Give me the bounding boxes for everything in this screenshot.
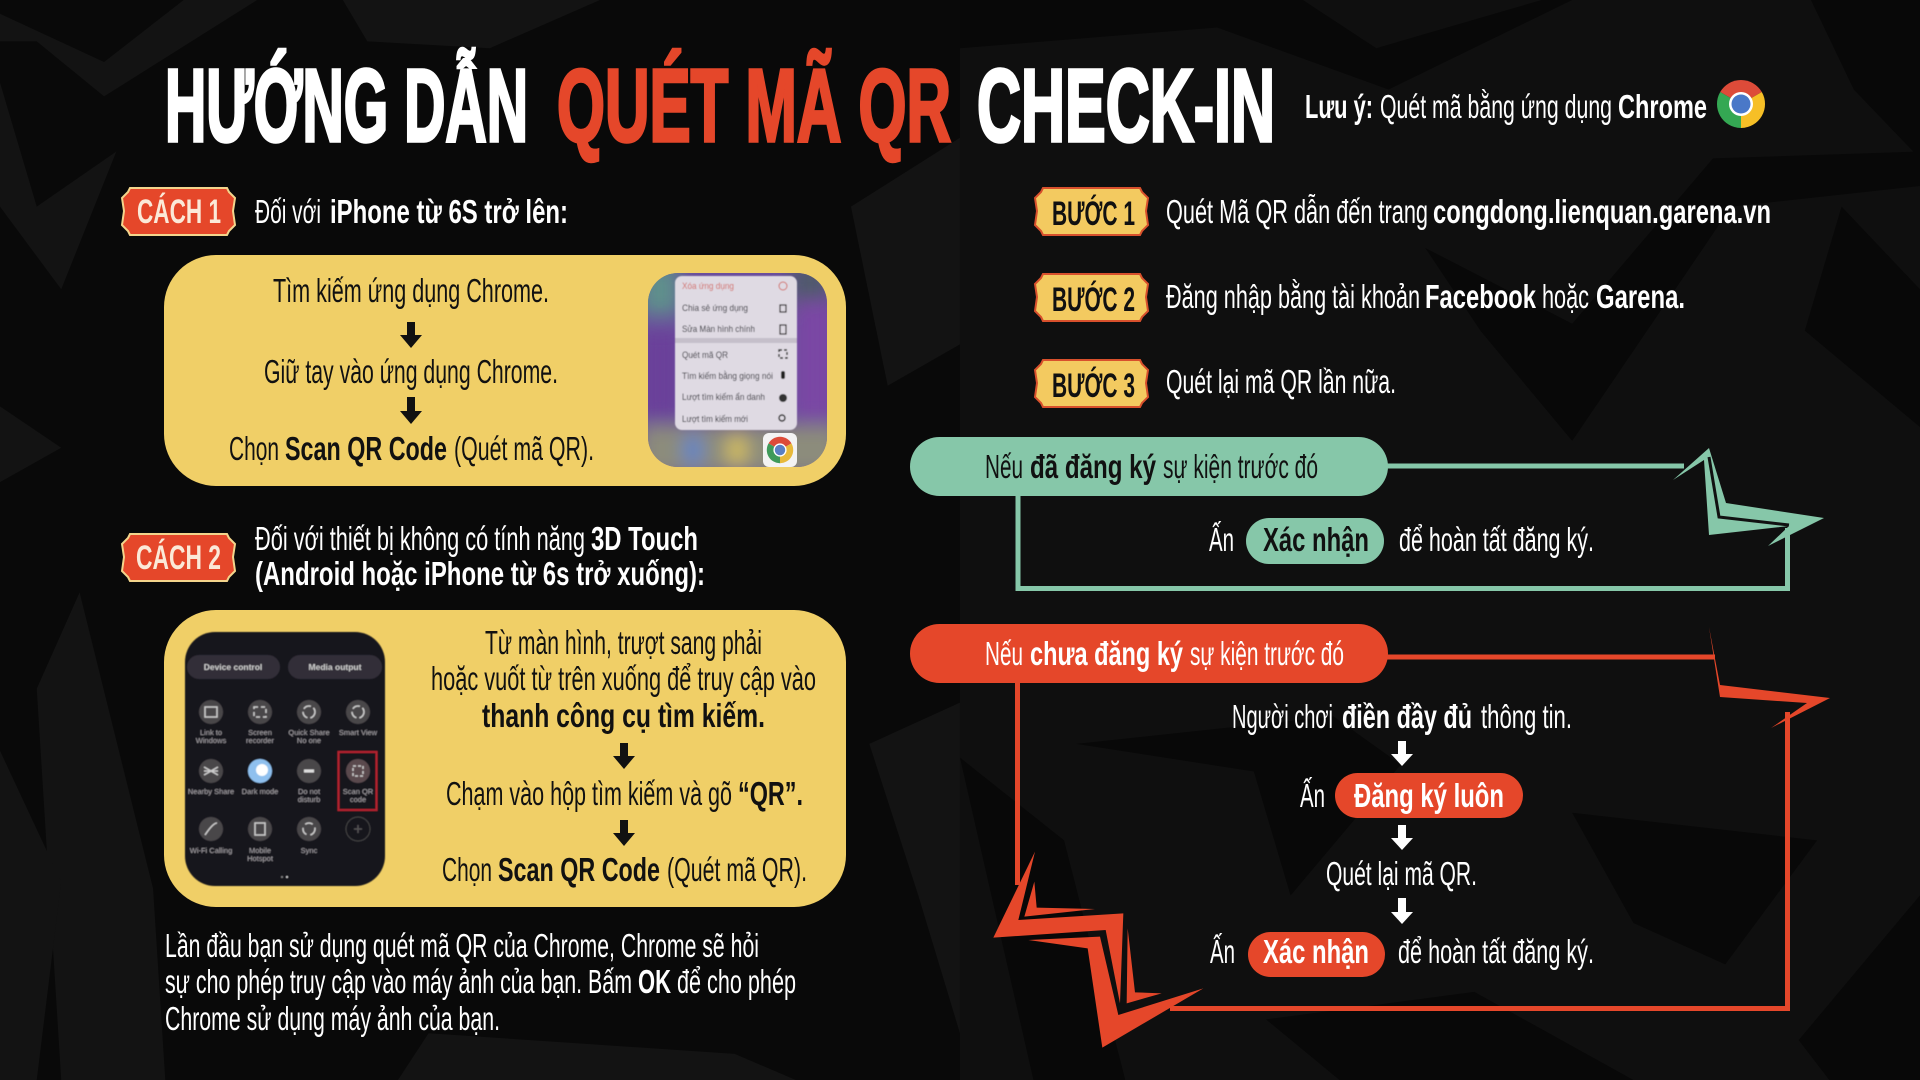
step 2 text: hoặc <box>1542 278 1589 315</box>
confirm line: Ấn <box>1209 521 1234 558</box>
step: fill in info: thông tin. <box>1481 698 1572 735</box>
text: first-use note: để cho phép <box>677 963 796 1000</box>
step 1 text: Quét Mã QR dẫn đến trang <box>1166 193 1428 230</box>
text: instructions line 1-3: hoặc vuốt từ trên xuống để truy cập vào <box>431 660 816 697</box>
heading: Cách 2 <box>255 520 705 592</box>
confirm line <box>1209 518 1594 564</box>
text: step three: Scan QR Code <box>285 430 447 467</box>
phone screenshot: Android quick panel: disturb <box>298 795 320 804</box>
phone screenshot: Android quick panel: Media output <box>309 662 362 672</box>
context menu: Quét mã QR <box>682 350 728 361</box>
title: HƯỚNG DẪN <box>165 48 528 163</box>
badge: Bước 1: BƯỚC 1 <box>1052 195 1135 233</box>
phone screenshot: Android quick panel: recorder <box>246 736 274 745</box>
heading: Cách 2: (Android hoặc iPhone từ 6s trở xuống): <box>255 555 705 592</box>
arrow <box>400 322 422 348</box>
note: use Chrome: Chrome <box>1618 88 1707 125</box>
badge: Bước 1 <box>1035 188 1148 235</box>
step: confirm: Xác nhận <box>1263 933 1369 970</box>
text: step one: Tìm kiếm ứng dụng Chrome. <box>273 272 549 309</box>
badge: Cách 2 <box>122 534 235 581</box>
header pill: chưa đăng ký <box>1030 635 1183 672</box>
badge: Bước 3 <box>1035 360 1148 407</box>
step: confirm <box>1210 932 1594 977</box>
context menu: Lượt tìm kiếm mới <box>682 414 748 425</box>
confirm line: Xác nhận <box>1263 521 1369 558</box>
step 1 text <box>1166 193 1771 230</box>
arrow <box>1391 741 1413 766</box>
header pill <box>910 437 1388 496</box>
chrome app tile <box>763 433 797 467</box>
phone screenshot: Android quick panel: Do not <box>298 787 321 796</box>
step: register now: Đăng ký luôn <box>1354 777 1504 814</box>
heading: Cách 2: Đối với thiết bị không có tính năng <box>255 520 585 557</box>
text: first-use note: Chrome sử dụng máy ảnh của bạn. <box>165 1000 500 1037</box>
step: fill in info: điền đầy đủ <box>1342 698 1472 735</box>
text: first-use note: OK <box>638 963 671 1000</box>
phone screenshot: iPhone Chrome menu <box>648 273 827 467</box>
frame lines <box>1018 657 1788 1008</box>
phone screenshot: Android quick panel: Screen <box>248 728 272 737</box>
note: use Chrome: Quét mã bằng ứng dụng <box>1380 88 1612 125</box>
context menu: Lượt tìm kiếm ẩn danh <box>682 392 765 403</box>
badge: Cách 1 <box>122 188 235 235</box>
heading: Cách 1 <box>255 193 568 230</box>
text: choose scan: Scan QR Code <box>498 851 660 888</box>
phone screenshot: Android quick panel: Smart View <box>339 728 378 737</box>
panel: already registered <box>910 437 1824 588</box>
context menu: Xóa ứng dụng <box>682 281 734 292</box>
step: register now: Ấn <box>1300 777 1325 814</box>
title: QUÉT MÃ QR <box>557 48 951 163</box>
lightning accent: top right <box>1709 627 1830 728</box>
text: first-use note: sự cho phép truy cập vào máy ảnh của bạn. Bấm <box>165 963 632 1000</box>
step: rescan: Quét lại mã QR. <box>1326 855 1477 892</box>
step 2 text: Facebook <box>1425 278 1536 315</box>
title: CHECK-IN <box>977 48 1275 163</box>
note: use Chrome: Lưu ý: <box>1305 88 1373 125</box>
text: search QR: “QR”. <box>738 775 803 812</box>
step: confirm: để hoàn tất đăng ký. <box>1398 933 1594 970</box>
step 3 text: Quét lại mã QR lần nữa. <box>1166 363 1396 400</box>
arrow <box>613 820 635 846</box>
text: instructions line 1-3: thanh công cụ tìm kiếm. <box>482 697 765 734</box>
step: register now <box>1300 773 1523 818</box>
text: step three: Chọn <box>229 430 279 467</box>
badge: Bước 2: BƯỚC 2 <box>1052 281 1135 319</box>
step: confirm: Ấn <box>1210 933 1235 970</box>
step 2 text: Garena. <box>1596 278 1685 315</box>
frame lines <box>1018 466 1788 588</box>
header pill <box>910 624 1388 683</box>
arrow <box>1391 825 1413 850</box>
phone screenshot: Android quick panel: Mobile <box>249 846 271 855</box>
confirm line: để hoàn tất đăng ký. <box>1399 521 1594 558</box>
arrow <box>613 743 635 769</box>
context menu: Tìm kiếm bằng giọng nói <box>682 371 773 382</box>
heading: Cách 1: Đối với <box>255 193 321 230</box>
text: instructions line 1-3 <box>431 624 816 734</box>
header pill: sự kiện trước đó <box>1163 448 1318 485</box>
text: step two: Giữ tay vào ứng dụng Chrome. <box>264 353 558 390</box>
text: choose scan: (Quét mã QR). <box>667 851 807 888</box>
text: step three: (Quét mã QR). <box>454 430 594 467</box>
arrow <box>400 397 422 424</box>
header pill: Nếu <box>985 448 1023 485</box>
text: choose scan <box>442 851 807 888</box>
step 1 text: congdong.lienquan.garena.vn <box>1433 193 1771 230</box>
phone screenshot: Android quick panel: code <box>350 795 366 804</box>
phone screenshot: Android quick panel: Device control <box>204 662 262 672</box>
text: search QR: Chạm vào hộp tìm kiếm và gõ <box>446 775 732 812</box>
step 2 text: Đăng nhập bằng tài khoản <box>1166 278 1420 315</box>
badge: Bước 3: BƯỚC 3 <box>1052 367 1135 405</box>
lightning accent: bottom left <box>993 852 1203 1048</box>
panel: Cách 2 <box>164 610 846 907</box>
badge: Cách 1: CÁCH 1 <box>137 193 221 231</box>
phone screenshot: Android quick panel: Windows <box>196 736 226 745</box>
text: first-use note <box>165 927 796 1037</box>
heading: Cách 1: iPhone từ 6S trở lên: <box>330 193 568 230</box>
heading: Cách 2: 3D Touch <box>591 520 698 557</box>
phone screenshot: Android quick panel: Dark mode <box>242 787 278 796</box>
header pill: Nếu <box>985 635 1023 672</box>
text: step three <box>229 430 594 467</box>
phone screenshot: Android quick panel: Scan QR <box>343 787 374 796</box>
step: fill in info: Người chơi <box>1232 698 1333 735</box>
phone screenshot: Android quick panel: Hotspot <box>247 854 274 863</box>
phone screenshot: Android quick panel <box>185 632 385 886</box>
step: fill in info <box>1232 698 1572 735</box>
badge: Bước 2 <box>1035 274 1148 321</box>
context menu <box>675 276 797 430</box>
phone screenshot: Android quick panel: Quick Share <box>288 728 330 737</box>
context menu: Chia sẻ ứng dụng <box>682 303 748 314</box>
badge: Cách 2: CÁCH 2 <box>136 539 221 577</box>
panel: Cách 1 <box>164 255 846 486</box>
phone screenshot: Android quick panel: Wi-Fi Calling <box>190 846 232 855</box>
text: instructions line 1-3: Từ màn hình, trượt sang phải <box>485 624 762 661</box>
phone screenshot: Android quick panel: Sync <box>301 846 318 855</box>
context menu: Sửa Màn hình chính <box>682 324 755 335</box>
phone screenshot: Android quick panel: No one <box>297 736 321 745</box>
title <box>165 48 1275 163</box>
arrow <box>1391 898 1413 924</box>
text: first-use note: Lần đầu bạn sử dụng quét mã QR của Chrome, Chrome sẽ hỏi <box>165 927 759 964</box>
header pill: sự kiện trước đó <box>1190 635 1344 672</box>
lightning accent: green <box>1673 448 1824 546</box>
text: choose scan: Chọn <box>442 851 492 888</box>
header pill: đã đăng ký <box>1030 448 1156 485</box>
panel: not registered <box>910 624 1830 1048</box>
phone screenshot: Android quick panel: Link to <box>200 728 222 737</box>
phone screenshot: Android quick panel: Nearby Share <box>188 787 234 796</box>
icon: chrome logo <box>1717 80 1765 128</box>
